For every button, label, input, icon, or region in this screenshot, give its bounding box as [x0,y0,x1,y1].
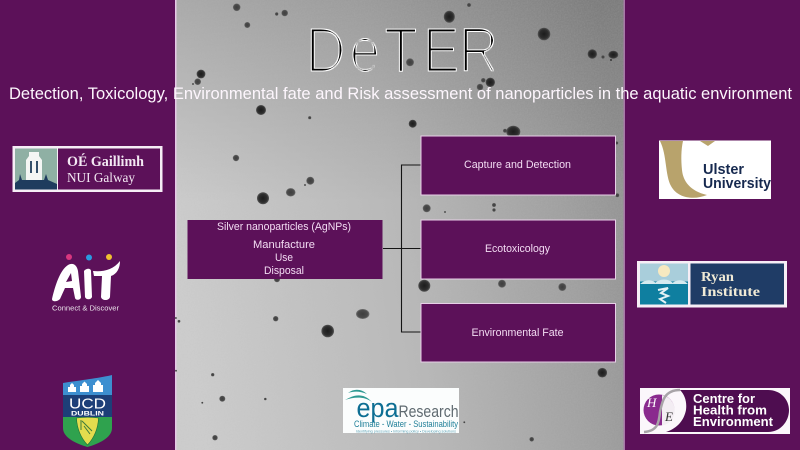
logo: EPA Research: Research [398,403,458,421]
logo: NUI Galway: OÉ Gaillimh [67,153,144,170]
panel: capture and detection [421,136,616,195]
logo: EPA Research: Identifying pressures • Informing policy • Developing solutions [356,429,456,433]
panel: silver nanoparticles: Use [275,252,293,264]
panel: environmental fate: Environmental Fate [472,327,564,339]
panel: left sidebar [0,0,175,450]
panel: silver nanoparticles [188,220,382,279]
logo: Ryan Institute: Ryan [701,269,735,284]
logo: EPA Research [343,388,459,433]
logo: EPA Research: Climate - Water - Sustainability [354,419,458,430]
panel: ecotoxicology: Ecotoxicology [485,243,551,255]
logo: EPA Research: epa [356,393,399,423]
subtitle: Detection, Toxicology, Environmental fate and Risk assessment of nanoparticles in the aquatic environment [9,84,792,103]
logo: UCD Dublin [63,375,112,447]
logo: Ulster University: Ulster [703,161,744,178]
logo: Ulster University [659,140,772,199]
logo: UCD Dublin: DUBLIN [71,412,104,418]
panel: capture and detection: Capture and Detection [464,159,571,171]
logo: Centre for Health from Environment [640,388,790,434]
logo: Centre for Health from Environment: H [646,395,657,410]
logo: NUI Galway: NUI Galway [67,171,135,186]
connector lines [383,165,421,332]
panel: silver nanoparticles: Silver nanoparticles (AgNPs) [217,221,351,233]
logo: AIT [52,254,120,312]
panel: silver nanoparticles: Disposal [264,265,304,277]
logo: Ulster University: University [703,175,772,192]
panel: ecotoxicology [421,220,616,279]
logo: Centre for Health from Environment: Centre for [693,392,755,406]
panel: right sidebar [625,0,800,450]
logo: NUI Galway [12,146,162,192]
panel: silver nanoparticles: Manufacture [253,239,315,251]
logo: Centre for Health from Environment: Environment [693,415,774,429]
title: DeTER [306,14,499,86]
logo: Ryan Institute: Institute [701,284,760,299]
nanoparticles scatter [175,3,619,442]
panel: environmental fate [421,304,616,362]
logo: Ryan Institute [637,261,787,308]
panel: micrograph background [175,0,625,450]
logo: UCD Dublin: UCD [69,396,106,412]
logo: AIT: Connect & Discover [52,304,120,312]
logo: Centre for Health from Environment: E [664,409,673,424]
logo: Centre for Health from Environment: Health from [693,404,767,418]
